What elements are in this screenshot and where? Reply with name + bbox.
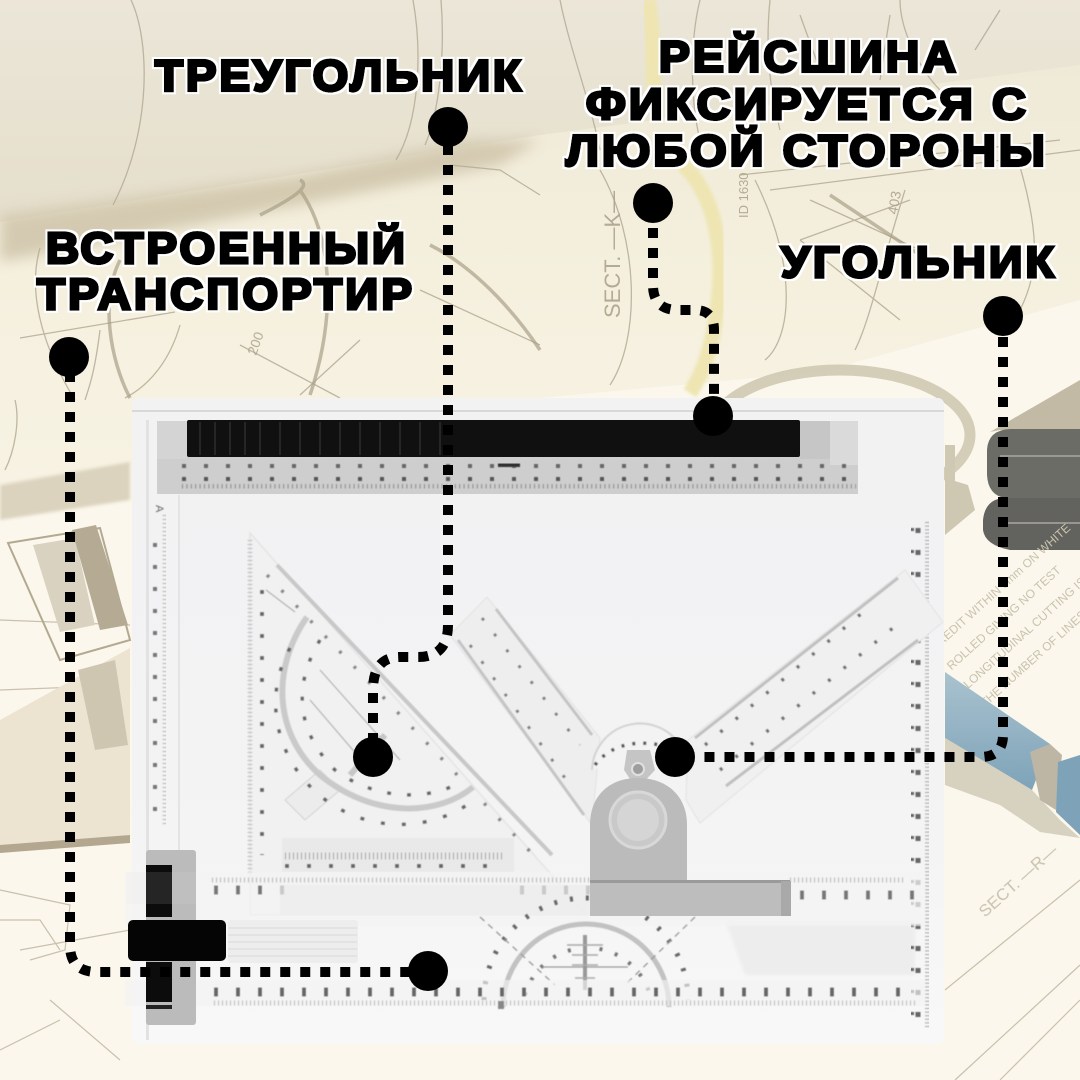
protractor arc on triangle <box>282 617 473 808</box>
small angle scale <box>592 723 680 770</box>
dark object upper right <box>983 380 1080 550</box>
blueprint label: ID 1630: ID 1630 <box>736 172 751 218</box>
upper roll of paper <box>0 0 1080 235</box>
label: T-square line 1: РЕЙСШИНА <box>659 30 959 82</box>
callout: triangle leader <box>353 107 468 777</box>
left vertical scale: A <box>153 505 165 513</box>
rotating head with knob <box>590 723 687 880</box>
label: square: УГОЛЬНИК <box>781 238 1057 287</box>
callout: protractor leader <box>49 337 448 991</box>
black clamps on left <box>126 850 358 1025</box>
callout: ruler arm leader <box>655 296 1023 777</box>
label: built-in protractor line 2: ТРАНСПОРТИР <box>37 270 415 319</box>
drawing board <box>125 398 944 1044</box>
blueprint lines <box>5 0 1080 470</box>
main lower roll <box>0 65 1080 485</box>
printed instructions text: CREDIT WITHIN 6mm ON WHITE <box>927 521 1073 654</box>
loupe glass <box>710 370 975 535</box>
dot: angle ruler label <box>983 296 1023 336</box>
blueprint label: 200: 200 <box>244 329 267 357</box>
lower horizontal ruler <box>125 980 925 1009</box>
dot: rail label <box>633 183 673 223</box>
dot: angle ruler target <box>655 737 695 777</box>
lower blueprint lines <box>0 620 1080 1080</box>
sliding bar <box>590 880 791 916</box>
printed instructions text <box>927 511 1080 710</box>
lower protractor <box>480 898 695 1007</box>
diagonal shadow band left <box>0 462 130 520</box>
blueprint label: 403: 403 <box>884 190 904 216</box>
yellow rubber band <box>648 0 720 393</box>
blueprint label: SECT -K-: SECT. —K— <box>600 191 625 318</box>
small ribbed drawing on left <box>0 525 130 853</box>
dot: triangle label <box>428 107 468 147</box>
dot: rail target <box>693 396 733 436</box>
callout: parallel rail leader <box>633 183 733 436</box>
parallel rail with scale <box>157 420 858 494</box>
label: triangle: ТРЕУГОЛЬНИК <box>155 52 524 100</box>
right vertical scale <box>912 522 928 1028</box>
blueprint label: SECT -R-: SECT. —R— <box>975 840 1061 921</box>
fold shadow <box>0 140 540 262</box>
dot: triangle target <box>353 737 393 777</box>
printed instructions text: ROLLED GIVING NO TEST <box>944 563 1064 673</box>
label: T-square line 3: ЛЮБОЙ СТОРОНЫ <box>566 124 1048 176</box>
set square triangle <box>250 533 587 915</box>
board body <box>132 398 944 1044</box>
blue pen <box>945 672 1080 838</box>
label: T-square line 2: ФИКСИРУЕТСЯ С <box>586 80 1029 129</box>
small scale on triangle base <box>282 838 514 872</box>
right ruler arm <box>686 570 943 823</box>
label: built-in protractor: ВСТРОЕННЫЙ <box>46 222 408 273</box>
upper horizontal ruler <box>125 872 925 926</box>
left ruler arm <box>450 597 600 825</box>
dot: protractor label <box>49 337 89 377</box>
dot: protractor target <box>408 951 448 991</box>
